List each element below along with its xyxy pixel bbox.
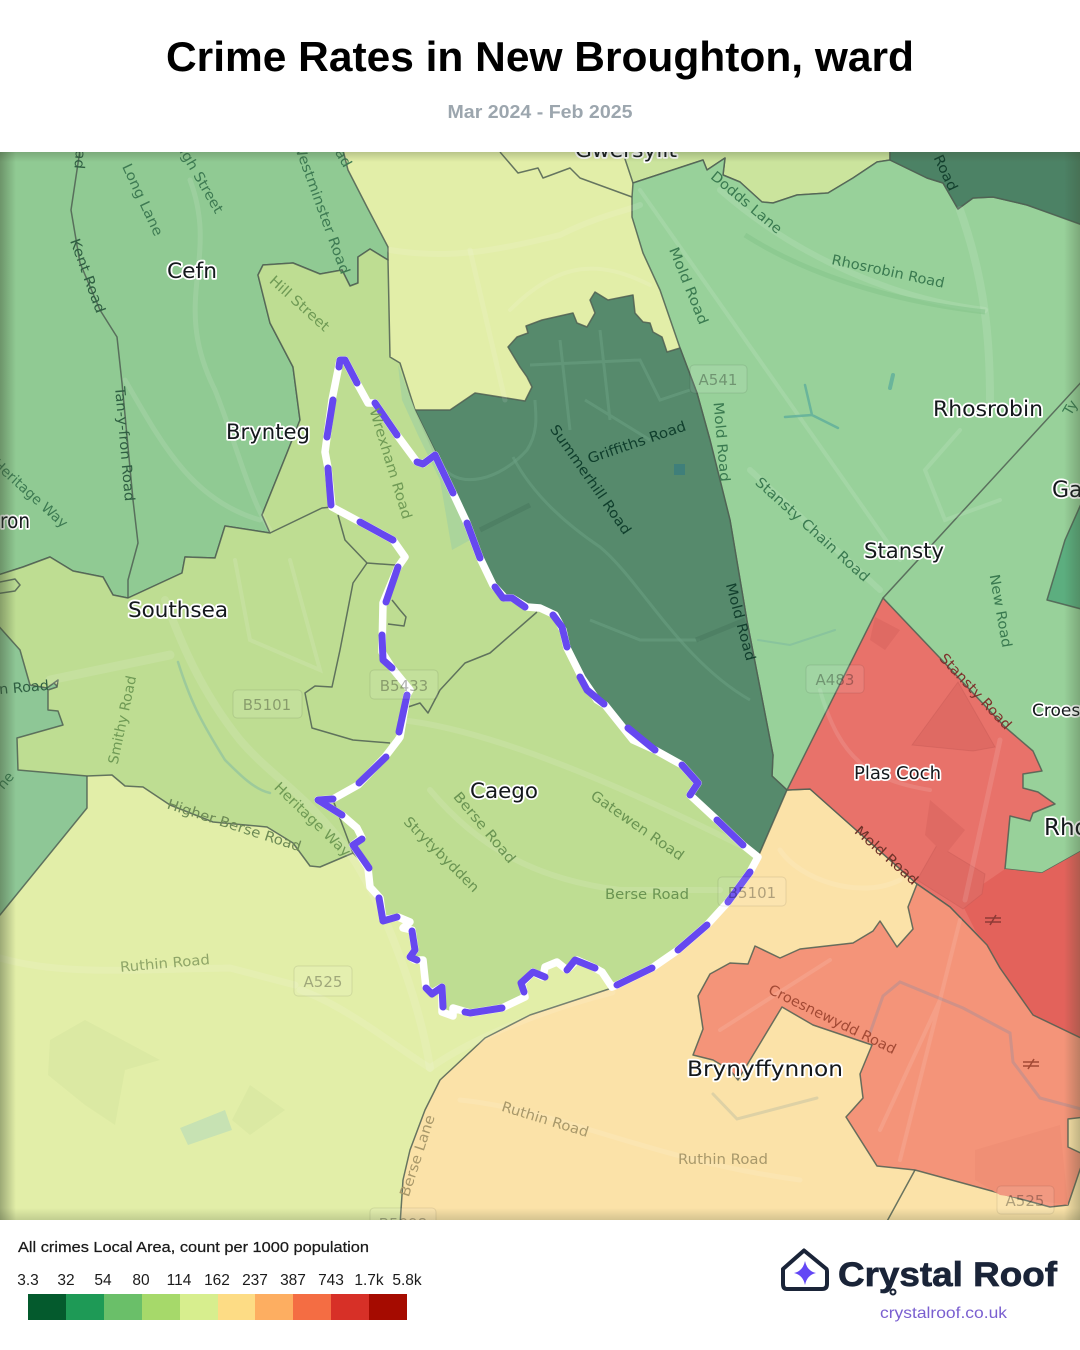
map background: low-crime pale yellow-green area [0, 152, 680, 1220]
legend scale values: 387 [280, 1272, 306, 1289]
road shield: B5101 east: B5101 [728, 884, 776, 902]
legend scale values: 162 [204, 1272, 230, 1289]
place label: Brynteg: Brynteg [226, 420, 310, 444]
subtitle: date range: Mar 2024 - Feb 2025 [448, 102, 632, 122]
road label: Kent Road: Kent Road [66, 237, 108, 315]
logo wordmark: Crystal Roof [838, 1256, 1058, 1294]
road shield: B5101 east [718, 877, 786, 906]
road label: Heritage Way east: Heritage Way [270, 780, 354, 860]
road label: Mold Road south: Mold Road [722, 581, 758, 663]
website link: crystalroof.co.uk [880, 1305, 1008, 1322]
road label: clipped Road north: Road [322, 130, 354, 170]
legend scale values: 5.8k [392, 1272, 422, 1289]
road label: Rhosrobin Road: Rhosrobin Road [830, 252, 946, 292]
internal ward boundaries [71, 150, 537, 853]
road label: Berse Lane: Berse Lane [397, 1113, 439, 1199]
roads inside the dark green ward [443, 330, 750, 700]
road label: clipped Road north-west: Road [70, 130, 90, 170]
road shield: A525 east [997, 1186, 1054, 1214]
road shield: A541: A541 [699, 371, 737, 389]
road shield: A525 east: A525 [1006, 1192, 1044, 1210]
place label: clipped ron: ron [0, 509, 30, 533]
place label: clipped Croes: Croes [1032, 701, 1080, 721]
road label: Long Lane: Long Lane [118, 161, 166, 239]
road shield: A483: A483 [816, 671, 854, 689]
road label: Berse Road diagonal: Berse Road [450, 789, 518, 867]
place label: Plas Coch: Plas Coch [854, 763, 941, 784]
road label: Ruthin Road diagonal: Ruthin Road [500, 1099, 590, 1141]
detail: red industrial blocks [870, 617, 995, 909]
legend scale values [17, 1272, 422, 1289]
area: Brynyffynnon pale orange [400, 789, 1080, 1225]
pond in dark green ward [674, 464, 685, 475]
road shield: A541 [690, 365, 747, 393]
logo icon: house with star [783, 1250, 827, 1289]
place label: Brynyffynnon: Brynyffynnon [687, 1057, 843, 1081]
darker road band along Rhosrobin Road [745, 235, 985, 312]
place label: Rhosrobin: Rhosrobin [933, 397, 1043, 421]
road shield: B5101 west [233, 690, 302, 718]
water: lake in the south-west [180, 1110, 232, 1145]
road label: Berse Road horizontal: Berse Road [605, 887, 689, 903]
legend scale values: 3.3 [17, 1272, 39, 1289]
road shield: A525 west: A525 [304, 973, 342, 991]
map edge vignette [0, 152, 1080, 1220]
road label: Wrexham Road: Wrexham Road [366, 407, 414, 521]
legend scale values: 54 [94, 1272, 112, 1289]
road shield: clipped at the bottom: B5098 [379, 1215, 427, 1233]
place label: Gwersyllt: Gwersyllt [575, 138, 677, 162]
legend scale values: 1.7k [354, 1272, 384, 1289]
road shield: A483 [806, 665, 864, 693]
legend scale values: 743 [318, 1272, 344, 1289]
boundary: line south of salmon ward [887, 1170, 916, 1220]
road label: Griffiths Road: Griffiths Road [586, 419, 688, 467]
area: Rhosrobin and Stansty green [632, 158, 1080, 900]
water: rivers [178, 375, 1080, 1119]
road label: Summerhill Road: Summerhill Road [546, 422, 634, 538]
woodland patches in the south-west [48, 1020, 285, 1135]
road label: Dodds Lane: Dodds Lane [707, 169, 785, 237]
area: Plas Coch red [786, 597, 1080, 938]
road label: Mold Road middle: Mold Road [710, 401, 732, 483]
road label: Westminster Road: Westminster Road [290, 139, 352, 277]
detail: green river strip beside the rail line [398, 365, 470, 550]
rail station icon: south [1023, 1059, 1039, 1069]
place label: Caego: Caego [470, 779, 538, 803]
rail station icon: north [985, 915, 1001, 925]
ward boundary: white underlay [318, 360, 758, 1016]
road shield: A525 west [294, 966, 352, 996]
boundary: diagonal east of Stansty [883, 378, 1080, 598]
area: right edge mid green patch [1047, 495, 1080, 610]
road label: Strytybydden: Strytybydden [400, 814, 482, 896]
road label: Hill Street: Hill Street [266, 273, 333, 335]
road label: Stansty Road: Stansty Road [936, 651, 1014, 733]
area: dark green low-crime ward [415, 292, 787, 860]
legend scale values: 237 [242, 1272, 268, 1289]
detail: far-left small outlined sliver [0, 579, 20, 594]
road label: Mold Road north: Mold Road [665, 245, 711, 327]
road label: Road top right: Road [930, 152, 960, 194]
road label: Mold Road at Plas Coch: Mold Road [851, 823, 921, 889]
road label: Stansty Chain Road: Stansty Chain Road [752, 475, 872, 585]
road label: Higher Berse Road: Higher Berse Road [165, 797, 303, 855]
road shield: B5433 [370, 670, 438, 699]
legend scale values: 80 [132, 1272, 150, 1289]
road shield: B5433: B5433 [380, 677, 428, 695]
area: Cefn green [0, 150, 388, 598]
detail: darker red east part [960, 849, 1080, 1040]
place label: Cefn: Cefn [167, 259, 217, 283]
road label: Smithy Road: Smithy Road [106, 674, 140, 766]
darker road band in dark green ward [480, 505, 745, 640]
legend heading: All crimes Local Area, count per 1000 population [18, 1239, 369, 1256]
place label: Stansty: Stansty [864, 539, 944, 563]
legend scale values: 32 [57, 1272, 75, 1289]
road label: Croesnewydd Road: Croesnewydd Road [766, 982, 898, 1058]
detail: salmon textured block [992, 1190, 1068, 1205]
place label: Southsea: Southsea [128, 598, 228, 622]
legend colour bar [28, 1294, 407, 1320]
area: top right dark green [890, 150, 1080, 226]
road label: Gatewen Road: Gatewen Road [587, 788, 687, 864]
area: upper boundary lines north of yellow area [500, 152, 632, 197]
road label: High Street: High Street [170, 136, 226, 217]
area: Southsea, Brynteg and Caego light green [0, 249, 758, 1016]
title: Crime Rates in New Broughton, ward [166, 33, 914, 80]
road shield: clipped at the bottom [370, 1208, 436, 1220]
road label: New Road: New Road [986, 573, 1014, 649]
ward boundary: purple dashes [318, 360, 750, 1013]
road label: Tan-y-fron Road: Tan-y-fron Road [111, 385, 137, 502]
legend scale values: 114 [167, 1272, 192, 1289]
area: left green wedge [0, 620, 87, 915]
road label: Ruthin Road horizontal: Ruthin Road [678, 1152, 768, 1168]
road network, light overlay [0, 180, 1000, 1180]
area: top light green patch [622, 150, 890, 203]
road label: Ruthin Road west: Ruthin Road [119, 952, 211, 976]
area: salmon ward south of Plas Coch [693, 884, 1080, 1207]
road shield: B5101 west: B5101 [243, 696, 291, 714]
